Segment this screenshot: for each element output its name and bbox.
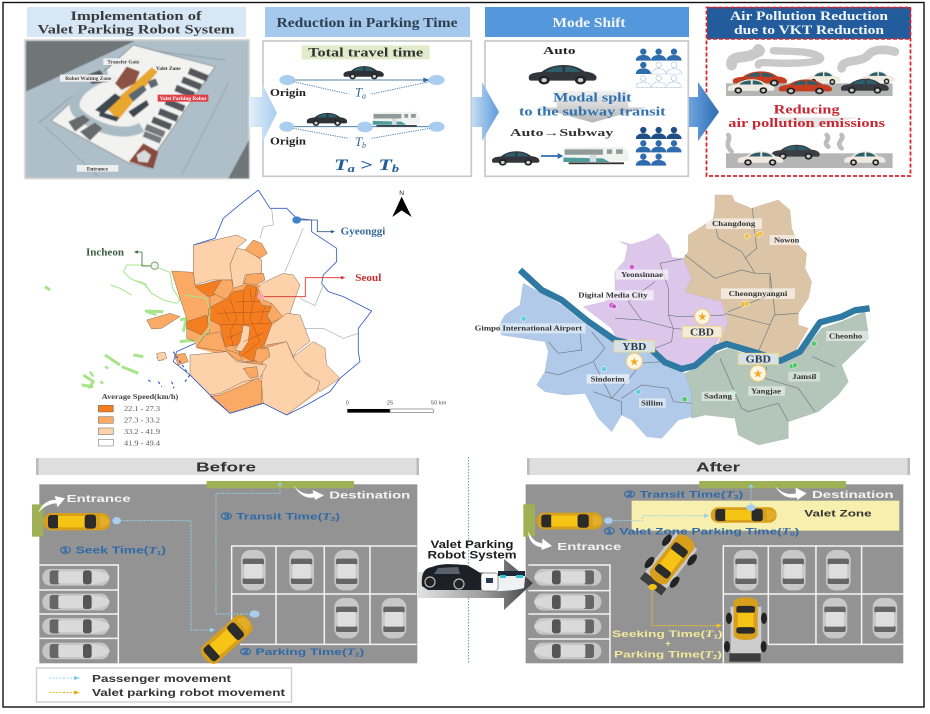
speed class polygons (147, 235, 340, 415)
label: destination: Destination (329, 491, 410, 502)
formula Ta > Tb: T (334, 157, 344, 174)
station labels (475, 218, 870, 408)
transit path (746, 484, 756, 511)
route Tb: b (362, 141, 366, 150)
heading: reduction in parking time (265, 7, 470, 37)
legend: average speed: Average Speed(km/h) (102, 393, 179, 401)
station markers (521, 231, 817, 402)
icon: north arrow (392, 190, 412, 217)
label: Nowon: Nowon (774, 236, 799, 245)
panel: implementation of valet parking robot system (25, 7, 249, 178)
heading: mode shift (485, 7, 689, 37)
label: modal split: Modal split (553, 91, 633, 105)
label: total travel time (302, 45, 430, 60)
Seoul district lines (217, 288, 270, 355)
legend: average speed (98, 393, 179, 447)
label: entrance: Entrance (87, 166, 108, 172)
parking facility aerial view (25, 40, 249, 178)
arrow: entrance (528, 532, 552, 550)
region: northeast (683, 195, 812, 362)
label: entrance: Entrance (557, 542, 622, 553)
label: Sadang (702, 392, 735, 401)
label: seeking plus parking time: Seeking Time( T (612, 629, 711, 639)
hub: CBD: ★ (697, 310, 707, 324)
label: seek time: ) (161, 545, 166, 556)
label: seeking plus parking time: Parking Time( T (614, 649, 710, 659)
heading: implementation: Implementation of (70, 9, 203, 23)
panel: after (523, 458, 910, 663)
travel time diagram (263, 41, 471, 176)
label: reducing air pollution emissions (728, 102, 885, 130)
arrow: destination (775, 486, 807, 500)
route Tb: Origin (270, 137, 307, 148)
region: southwest (498, 283, 692, 438)
label: Cheonho: Cheonho (829, 331, 863, 340)
label: transit time: ) (739, 489, 743, 499)
robot movement path (648, 584, 722, 628)
region: northwest (583, 233, 728, 367)
yellow car entering (43, 513, 110, 530)
label: auto to subway: Auto→Subway (510, 127, 614, 139)
passenger path (604, 513, 709, 524)
label: valet zone parking time: ) (795, 526, 799, 536)
label: seeking plus parking time: + (665, 639, 671, 649)
route Ta: Origin (270, 88, 307, 99)
road top (726, 83, 893, 96)
label: Jamsil (788, 372, 820, 382)
gray arrow (417, 559, 533, 610)
hub: GBD: GBD (746, 354, 771, 365)
valet zone (632, 501, 899, 531)
panel: mode shift (485, 7, 689, 176)
label: seeking plus parking time: ) (717, 649, 722, 659)
icon: car (529, 65, 597, 84)
formula Ta > Tb: T (378, 157, 388, 174)
arrow: entrance (38, 496, 65, 513)
label: valet parking robot system (428, 539, 517, 562)
map: Gyeonggi average speed (45, 190, 447, 447)
heading: after (527, 458, 910, 475)
green gates (32, 504, 43, 537)
hub: YBD: YBD (622, 342, 647, 353)
legend: average speed: 22.1 - 27.3 (124, 404, 160, 413)
route Ta (270, 66, 445, 101)
legend: average speed: 41.9 - 49.4 (124, 438, 160, 447)
callout: Seoul (257, 273, 382, 300)
valet zone: Valet Zone (804, 509, 872, 519)
label: seeking plus parking time (612, 629, 723, 661)
divider between before and after (468, 457, 470, 664)
hub: YBD: ★ (629, 354, 639, 368)
label: Cheongnyangni (721, 288, 795, 299)
arrow 3 (689, 82, 719, 141)
label: transit time: ) (335, 511, 340, 521)
callout: Gyeonggi: Gyeonggi (341, 227, 385, 238)
callout: Incheon: Incheon (86, 248, 124, 259)
yellow car entering (537, 513, 603, 529)
label: Sindorim (587, 374, 629, 384)
down arrow behind text (538, 91, 647, 123)
label: Yangjae: Yangjae (751, 386, 782, 395)
heading: mode shift: Mode Shift (552, 15, 626, 30)
arrow 1 (249, 83, 277, 143)
formula Ta > Tb: > (355, 157, 378, 174)
scale bar: 25 (387, 400, 393, 406)
label: transit time: ③ Transit Time( T (220, 511, 328, 522)
robot and suv (422, 564, 525, 591)
legend: movement (36, 668, 292, 702)
label: parking time: 2 (355, 653, 360, 659)
label: Jamsil: Jamsil (792, 372, 816, 381)
formula Ta > Tb: a (348, 164, 355, 175)
panel: before (32, 458, 419, 667)
arrow 2 (472, 82, 499, 141)
label: Digital Media City: Digital Media City (578, 290, 648, 299)
heading: before: Before (196, 460, 256, 474)
label: valet zone: Valet Zone (156, 66, 181, 72)
label: Yangjae (748, 386, 785, 396)
yellow car in valet zone (711, 507, 777, 523)
label: valet parking robot system: Robot System (428, 550, 517, 562)
label: robot waiting zone (60, 75, 117, 82)
hub: CBD: CBD (690, 327, 714, 338)
legend: average speed: 27.3 - 33.2 (124, 416, 160, 425)
label: transit time: 3 (331, 517, 335, 523)
label: Sadang: Sadang (704, 392, 732, 401)
label: seeking plus parking time: 2 (713, 655, 717, 661)
label: auto: Auto (543, 45, 576, 57)
label: Yeonsinnae (616, 270, 668, 280)
route Ta: T (355, 86, 362, 100)
label: modal split: to the subway transit (519, 104, 667, 118)
parking lot scene after (523, 481, 903, 663)
parking lot scene before (32, 481, 417, 667)
route Ta: a (362, 92, 366, 101)
label: Sillim (639, 398, 666, 408)
label: Changdong (706, 218, 762, 229)
icon: people, one filled of nine (636, 48, 682, 87)
scale bar (346, 400, 447, 413)
islands and Incheon outline (45, 265, 193, 388)
label: valet parking robot system: Valet Parking (430, 539, 514, 551)
icon: north arrow: N (399, 190, 404, 197)
route Tb (270, 112, 445, 150)
heading: air pollution reduction: due to VKT Reduction (734, 22, 885, 37)
parked cars (534, 550, 897, 659)
label: valet parking robot: Valet Parking Robot (160, 96, 206, 102)
region: southeast (685, 312, 869, 445)
label: seeking plus parking time: 1 (713, 635, 718, 641)
hub: CBD (682, 309, 722, 338)
label: seeking plus parking time: ) (718, 629, 723, 639)
label: Cheongnyangni: Cheongnyangni (729, 289, 787, 298)
arrow: destination (293, 485, 324, 500)
parking lines (39, 546, 417, 663)
label: parking time: ② Parking Time( T (239, 647, 352, 658)
scale bar: 0 (346, 400, 349, 406)
panel: reduction in parking time (263, 7, 471, 176)
label: Yeonsinnae: Yeonsinnae (621, 270, 664, 279)
label: transit time: 3 (734, 495, 739, 501)
red dashed border (706, 8, 910, 176)
Han river (520, 270, 870, 369)
heading: air pollution reduction (707, 7, 911, 39)
label: Nowon (770, 235, 799, 245)
label: total travel time: Total travel time (308, 46, 424, 60)
traffic cars (728, 71, 895, 94)
callout: Gyeonggi (292, 216, 385, 238)
heading: implementation: Valet Parking Robot System (38, 22, 235, 36)
passenger path transit (216, 482, 282, 618)
road bottom with cars (726, 135, 893, 168)
heading: implementation (27, 7, 246, 37)
legend: movement: Passenger movement (92, 674, 232, 685)
modal split diagram (485, 41, 688, 176)
icon: car to train (492, 147, 629, 166)
label: entrance (77, 165, 118, 172)
label: Digital Media City (578, 290, 654, 300)
label: transfer gate: Transfer Gate (107, 59, 140, 65)
callout: Seoul: Seoul (355, 273, 382, 284)
robot carrying car (635, 526, 704, 599)
emissions illustration (726, 49, 895, 168)
label: Changdong: Changdong (712, 219, 756, 228)
robot with parked car (724, 597, 767, 662)
label: transfer gate (103, 58, 143, 65)
label: Gimpo International Airport: Gimpo International Airport (475, 324, 583, 333)
label: valet zone parking time: 0 (790, 532, 795, 538)
map: Seoul business districts (475, 195, 870, 445)
label: valet zone parking time: ① Valet Zone Parking Time( T (603, 526, 787, 537)
parking lines (528, 546, 903, 663)
heading: reduction in parking time: Reduction in Parking Time (276, 15, 458, 30)
label: parking time: ) (360, 647, 364, 657)
label: transit time: ② Transit Time( T (623, 489, 731, 500)
label: seek time: ① Seek Time( T (59, 545, 154, 556)
centre: valet parking robot system (417, 539, 533, 610)
passenger path seek (112, 517, 215, 632)
legend: average speed: 33.2 - 41.9 (124, 427, 160, 436)
label: modal split (519, 91, 667, 118)
callout: Incheon (86, 248, 158, 269)
heading: air pollution reduction: Air Pollution Reduction (730, 8, 889, 23)
green gates (523, 504, 535, 537)
scale bar: 50 km (431, 400, 447, 406)
heading: after: After (696, 460, 740, 474)
parked cars (42, 550, 406, 659)
formula Ta > Tb: b (392, 164, 399, 175)
smog clouds (732, 49, 895, 68)
route Tb: T (355, 135, 362, 149)
hub: GBD (738, 353, 778, 381)
Gyeonggi outer and inner boundary (173, 190, 372, 415)
yellow car parking (197, 611, 256, 667)
district lines (545, 208, 835, 422)
panel: air pollution reduction (706, 7, 911, 176)
icon: people, mostly filled (636, 127, 682, 166)
label: reducing air pollution emissions: Reducing (774, 102, 841, 116)
label: Cheonho (826, 331, 870, 341)
label: Sillim: Sillim (641, 398, 663, 407)
label: robot waiting zone: Robot Waiting Zone (65, 76, 112, 82)
hub: GBD: ★ (753, 366, 763, 380)
label: Sindorim: Sindorim (591, 375, 625, 384)
label: entrance: Entrance (67, 494, 131, 505)
hub: YBD (614, 341, 655, 369)
Incheon boundary over the map (182, 295, 210, 342)
legend: movement: Valet parking robot movement (92, 688, 286, 699)
label: reducing air pollution emissions: air pollution emissions (728, 116, 885, 130)
formula Ta > Tb (334, 157, 399, 175)
label: destination: Destination (812, 490, 894, 501)
label: seek time: 1 (157, 551, 161, 557)
heading: before (36, 458, 419, 475)
